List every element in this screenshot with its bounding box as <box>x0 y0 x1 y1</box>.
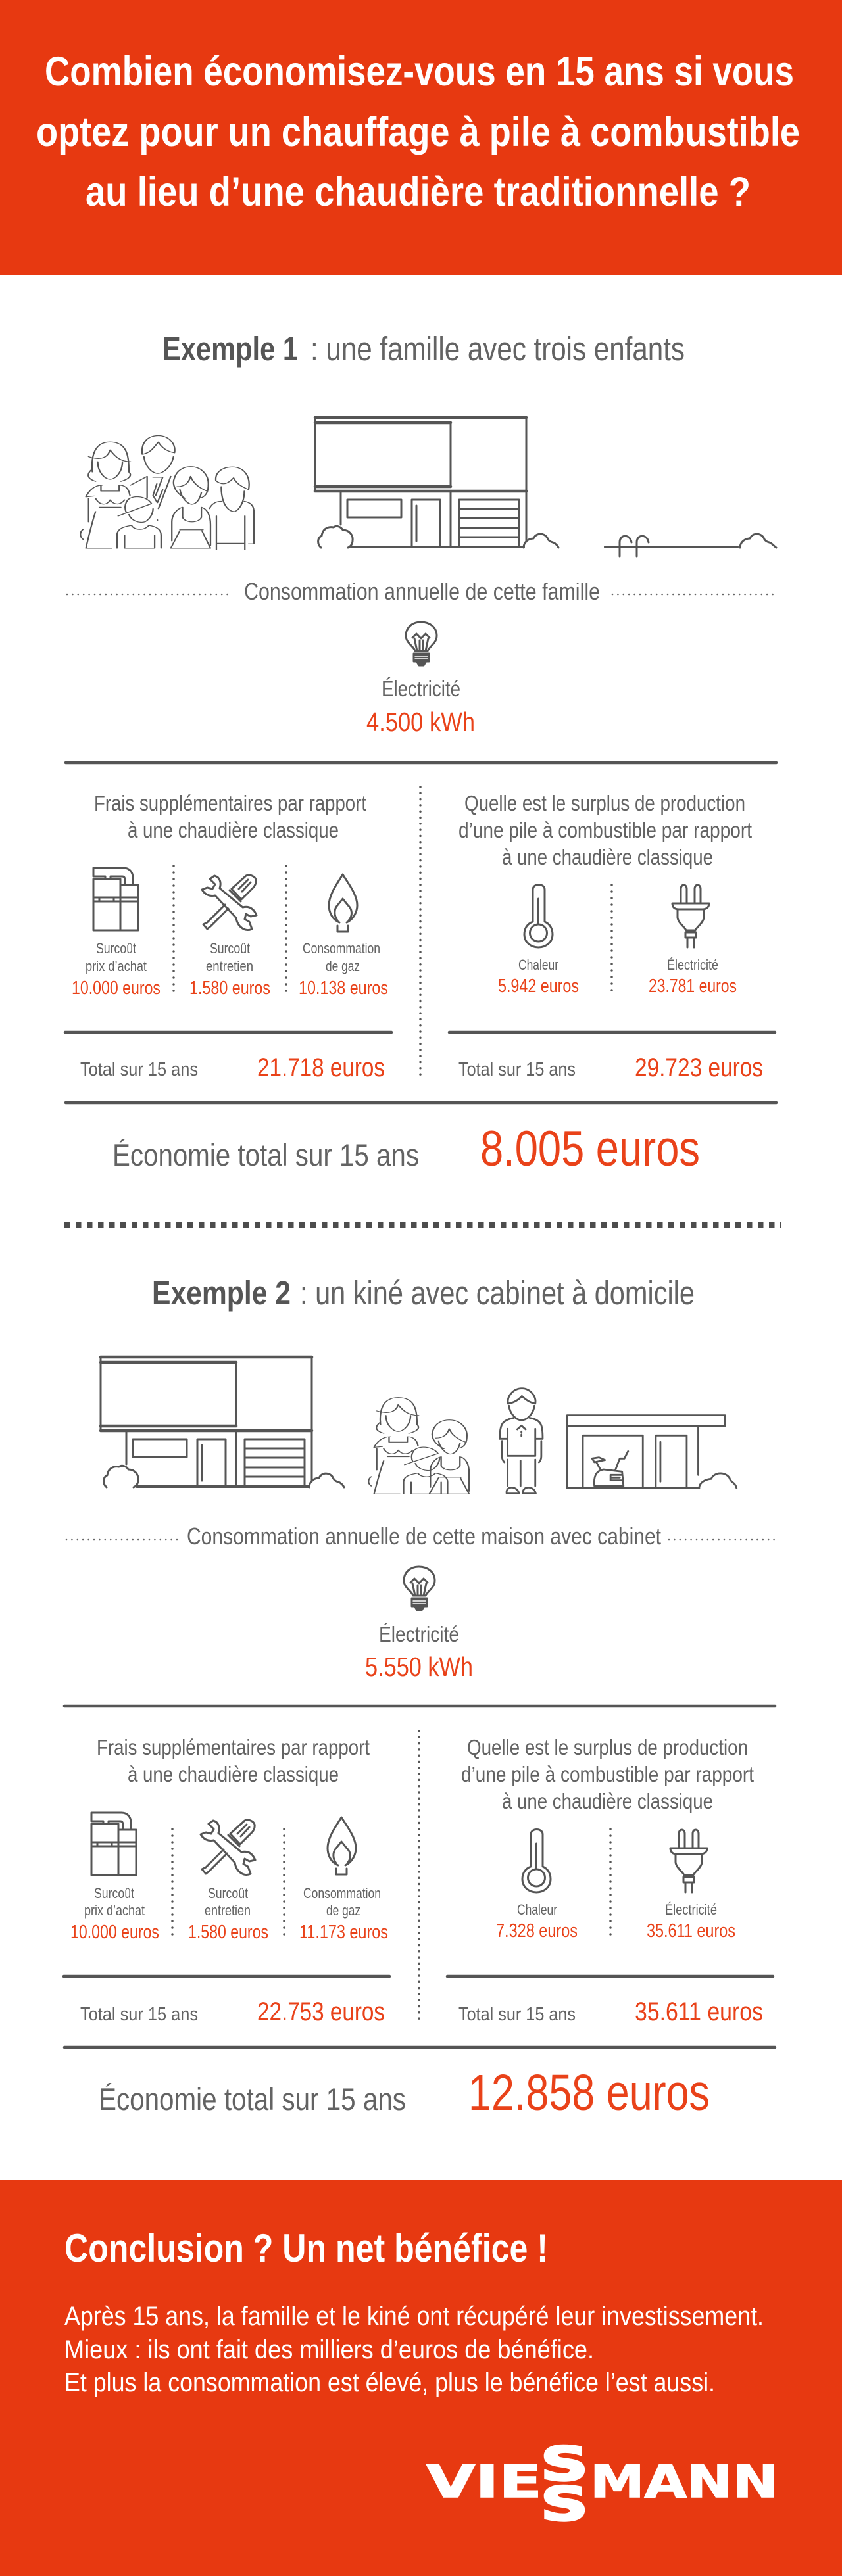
illustration: house <box>101 1357 344 1487</box>
heading: exemple 2 <box>152 1274 695 1312</box>
heading: surplus de production: d’une pile à combustible par rapport <box>458 818 752 842</box>
icon: gas flame <box>329 874 357 932</box>
item: surcoût prix d'achat <box>70 1885 159 1943</box>
icon: wrench and screwdriver <box>201 1820 255 1874</box>
heading: surplus de production: Quelle est le surplus de production <box>467 1735 748 1759</box>
total: 29.723 euros <box>458 1053 763 1082</box>
heading: exemple 2: Exemple 2 <box>152 1274 291 1312</box>
icon: thermometer <box>522 1829 551 1892</box>
item: électricité <box>647 1901 735 1942</box>
heading: frais supplémentaires: Frais supplémentaires par rapport <box>94 791 366 815</box>
heading: frais supplémentaires: Frais supplémentaires par rapport <box>97 1735 370 1759</box>
logo: Viessmann <box>426 2437 778 2531</box>
heading: exemple 1: : une famille avec trois enfants <box>310 330 685 368</box>
heading: frais supplémentaires: à une chaudière classique <box>128 818 339 842</box>
heading: surplus de production: d’une pile à combustible par rapport <box>461 1762 754 1786</box>
icon: light bulb <box>406 622 437 665</box>
heading: exemple 1 <box>162 330 685 368</box>
conclusion heading: Conclusion ? Un net bénéfice ! <box>64 2226 548 2270</box>
heading: surplus de production: à une chaudière classique <box>502 845 713 869</box>
item: consommation de gaz <box>299 940 388 999</box>
icon: electric plug <box>672 885 709 947</box>
heading: surplus de production: à une chaudière classique <box>502 1789 713 1813</box>
item: consommation de gaz: Consommation <box>303 1885 381 1901</box>
conclusion text: Après 15 ans, la famille et le kiné ont récupéré leur investissement. <box>64 2302 764 2331</box>
item: surcoût entretien: 1.580 euros <box>189 978 270 999</box>
savings: 12.858 euros: Économie total sur 15 ans <box>99 2082 406 2116</box>
icon: light bulb <box>404 1567 435 1610</box>
logo: Viessmann: VIE <box>426 2456 542 2508</box>
heading: frais supplémentaires: à une chaudière classique <box>128 1762 339 1786</box>
total: 21.718 euros: Total sur 15 ans <box>80 1059 198 1080</box>
item: surcoût prix d'achat: 10.000 euros <box>70 1922 159 1943</box>
item: électricité <box>649 957 737 997</box>
item: surcoût entretien: Surcoût <box>208 1885 248 1901</box>
conclusion text: Mieux : ils ont fait des milliers d’euros de bénéfice. <box>64 2335 594 2364</box>
item: surcoût prix d'achat: Surcoût <box>94 1885 134 1901</box>
savings: 8.005 euros: Économie total sur 15 ans <box>112 1137 419 1172</box>
conclusion text: Et plus la consommation est élevé, plus le bénéfice l’est aussi. <box>64 2368 715 2397</box>
logo: Viessmann: MANN <box>590 2456 778 2508</box>
savings: 8.005 euros: 8.005 euros <box>480 1121 700 1177</box>
item: surcoût entretien: entretien <box>205 1902 251 1919</box>
header band <box>0 0 842 275</box>
item: surcoût entretien <box>188 1885 268 1943</box>
total: 21.718 euros <box>80 1053 385 1082</box>
item: surcoût entretien: 1.580 euros <box>188 1922 268 1943</box>
item: chaleur: 7.328 euros <box>496 1920 578 1942</box>
total: 21.718 euros: 21.718 euros <box>257 1053 385 1082</box>
heading: surplus de production <box>458 791 752 869</box>
item: électricité: 35.611 euros <box>647 1920 735 1942</box>
title: au lieu d’une chaudière traditionnelle ? <box>86 169 751 215</box>
illustration: physiotherapist <box>500 1389 543 1494</box>
icon: boiler <box>93 868 138 930</box>
item: chaleur <box>496 1901 578 1942</box>
illustration: family <box>368 1398 469 1494</box>
electricity consumption: 5.550 kWh: Électricité <box>379 1622 459 1646</box>
item: surcoût prix d'achat: 10.000 euros <box>72 978 161 999</box>
total: 29.723 euros: 29.723 euros <box>635 1053 763 1082</box>
panel: extra costs, exemple 1 <box>65 791 391 1082</box>
heading: exemple 1: Exemple 1 <box>162 330 298 368</box>
item: surcoût prix d'achat: Surcoût <box>96 940 136 957</box>
title <box>36 49 800 215</box>
total: 35.611 euros: 35.611 euros <box>635 1997 763 2026</box>
icon: wrench and screwdriver <box>202 875 257 930</box>
panel: extra costs, exemple 2 <box>64 1735 389 2026</box>
panel: production surplus, exemple 1 <box>449 791 775 1082</box>
electricity consumption: 4.500 kWh <box>366 677 475 737</box>
item: consommation de gaz: 11.173 euros <box>299 1922 388 1943</box>
item: consommation de gaz: Consommation <box>303 940 380 957</box>
consumption divider: maison avec cabinet: Consommation annuelle de cette maison avec cabinet <box>187 1523 661 1550</box>
item: surcoût prix d'achat <box>72 940 161 999</box>
electricity consumption: 4.500 kWh: 4.500 kWh <box>366 707 475 737</box>
item: électricité: Électricité <box>665 1901 717 1918</box>
icon: electric plug <box>670 1830 707 1892</box>
heading: surplus de production <box>461 1735 754 1813</box>
icon: boiler <box>91 1813 136 1875</box>
item: chaleur <box>498 957 579 997</box>
item: surcoût entretien: Surcoût <box>210 940 250 957</box>
item: électricité: Électricité <box>667 957 718 973</box>
item: chaleur: Chaleur <box>518 957 558 973</box>
total: 35.611 euros <box>458 1997 763 2026</box>
icon: gas flame <box>328 1817 356 1874</box>
item: consommation de gaz: de gaz <box>326 958 360 974</box>
item: surcoût entretien: entretien <box>206 958 253 974</box>
savings: 8.005 euros <box>112 1121 700 1177</box>
logo: Viessmann: S <box>541 2477 588 2531</box>
item: chaleur: Chaleur <box>517 1901 557 1918</box>
illustration: treatment room <box>567 1416 737 1488</box>
illustration: garden <box>605 534 776 556</box>
heading: exemple 2: : un kiné avec cabinet à domicile <box>300 1274 695 1312</box>
conclusion text <box>64 2302 764 2397</box>
illustration: family of five <box>80 435 254 550</box>
total: 22.753 euros: 22.753 euros <box>257 1997 385 2026</box>
total: 22.753 euros: Total sur 15 ans <box>80 2004 198 2025</box>
total: 22.753 euros <box>80 1997 385 2026</box>
electricity consumption: 5.550 kWh: 5.550 kWh <box>365 1652 473 1682</box>
consumption divider: famille: Consommation annuelle de cette famille <box>244 578 600 605</box>
item: consommation de gaz: de gaz <box>326 1902 360 1919</box>
conclusion band <box>0 2180 842 2576</box>
heading: frais supplémentaires <box>94 791 366 842</box>
heading: frais supplémentaires <box>97 1735 370 1786</box>
heading: surplus de production: Quelle est le surplus de production <box>464 791 745 815</box>
item: électricité: 23.781 euros <box>649 976 737 997</box>
icon: thermometer <box>524 885 553 947</box>
illustration: house <box>315 417 558 548</box>
item: surcoût prix d'achat: prix d’achat <box>86 958 147 974</box>
item: chaleur: 5.942 euros <box>498 976 579 997</box>
total: 35.611 euros: Total sur 15 ans <box>458 2004 576 2025</box>
logo: Viessmann: S <box>541 2437 588 2491</box>
item: consommation de gaz: 10.138 euros <box>299 978 388 999</box>
electricity consumption: 5.550 kWh <box>365 1622 473 1682</box>
item: surcoût prix d'achat: prix d’achat <box>84 1902 145 1919</box>
savings: 12.858 euros <box>99 2064 710 2121</box>
item: consommation de gaz <box>299 1885 388 1943</box>
electricity consumption: 4.500 kWh: Électricité <box>382 677 460 701</box>
savings: 12.858 euros: 12.858 euros <box>468 2064 710 2121</box>
panel: production surplus, exemple 2 <box>447 1735 773 2026</box>
total: 29.723 euros: Total sur 15 ans <box>458 1059 576 1080</box>
item: surcoût entretien <box>189 940 270 999</box>
